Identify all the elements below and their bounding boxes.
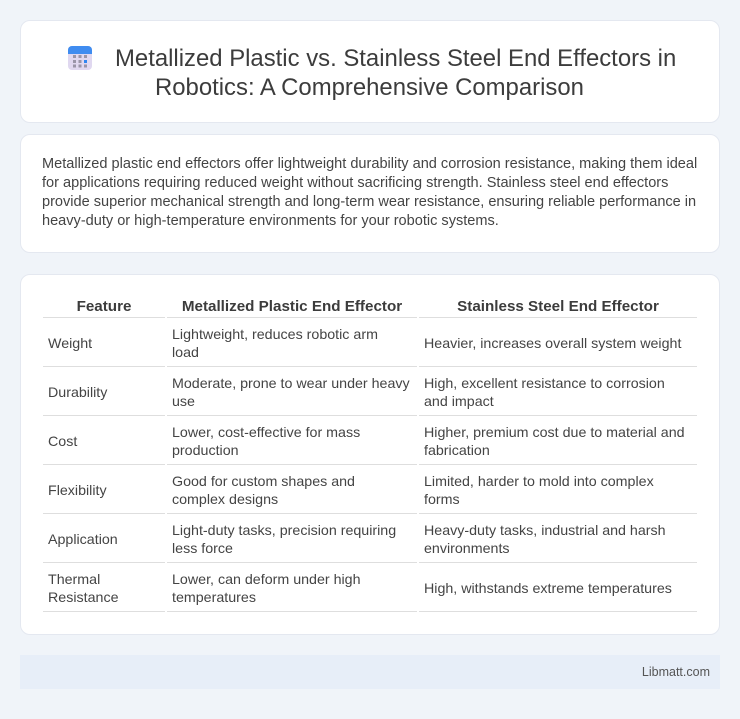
- text: forms: [424, 492, 460, 508]
- text: Lightweight, reduces robotic arm: [172, 327, 378, 343]
- text: Good for custom shapes and: [172, 474, 355, 490]
- text: temperatures: [172, 590, 256, 606]
- row: thermal resistance: [48, 572, 118, 606]
- text: and impact: [424, 394, 494, 410]
- text: Heavy-duty tasks, industrial and harsh: [424, 523, 666, 539]
- table header: metallized plastic: Metallized Plastic End Effector: [182, 298, 402, 315]
- text: Limited, harder to mold into complex: [424, 474, 654, 490]
- text block: intro: Metallized plastic end effectors offer lightweight durability and corrosion resistance, making them ideal: [42, 156, 697, 172]
- text: load: [172, 345, 199, 361]
- panel: intro card: [20, 134, 720, 253]
- row: thermal resistance: Thermal: [48, 572, 100, 588]
- row: thermal resistance: Resistance: [48, 590, 118, 606]
- row: durability: Durability: [48, 385, 107, 401]
- text block: intro: [42, 156, 697, 229]
- table header: feature: Feature: [77, 298, 131, 315]
- text block: intro: for applications requiring reduced weight without sacrificing strength. Stainless steel end effectors: [42, 175, 668, 191]
- footer text: Libmatt.com: [642, 665, 710, 679]
- text: use: [172, 394, 195, 410]
- footer bar: [20, 655, 720, 689]
- text: High, excellent resistance to corrosion: [424, 376, 665, 392]
- title: Metallized Plastic vs. Stainless Steel End Effectors in: [115, 45, 676, 72]
- text: High, withstands extreme temperatures: [424, 581, 672, 597]
- text: Lower, cost-effective for mass: [172, 425, 360, 441]
- text block: intro: heavy-duty or high-temperature environments for your robotic systems.: [42, 213, 499, 229]
- row: application: Application: [48, 532, 118, 548]
- row: flexibility: Flexibility: [48, 483, 107, 499]
- text: environments: [424, 541, 510, 557]
- text: production: [172, 443, 239, 459]
- text: less force: [172, 541, 233, 557]
- title line 2: Robotics: A Comprehensive Comparison: [155, 74, 584, 101]
- row: cost: Cost: [48, 434, 77, 450]
- text: fabrication: [424, 443, 490, 459]
- panel: comparison table card: [20, 274, 720, 635]
- row: weight: Weight: [48, 336, 92, 352]
- table header: stainless steel: Stainless Steel End Effector: [457, 298, 659, 315]
- text: Heavier, increases overall system weight: [424, 336, 681, 352]
- text: Light-duty tasks, precision requiring: [172, 523, 396, 539]
- panel: title card: [20, 20, 720, 123]
- text: complex designs: [172, 492, 278, 508]
- text block: intro: provide superior mechanical strength and long-term wear resistance, ensuring reliable performance in: [42, 194, 696, 210]
- text: Moderate, prone to wear under heavy: [172, 376, 410, 392]
- text: Lower, can deform under high: [172, 572, 361, 588]
- icon: calendar grid: [68, 46, 92, 70]
- text: Higher, premium cost due to material and: [424, 425, 685, 441]
